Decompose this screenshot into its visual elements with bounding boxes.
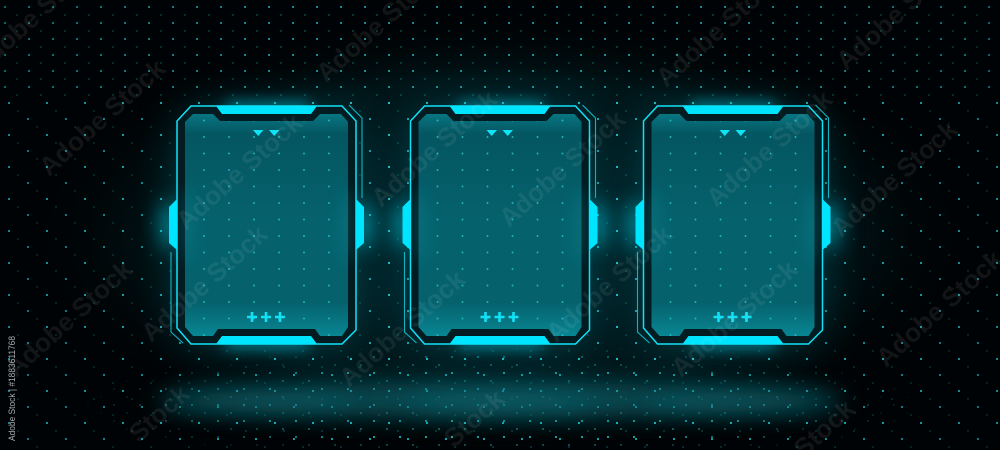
- panel 2: [398, 103, 602, 347]
- panel 2 bottom bar: [450, 336, 550, 344]
- panel 1 corner accent lines: [171, 105, 362, 343]
- panel 3 screen: [646, 114, 820, 336]
- panel 1 bottom bar: [216, 336, 317, 344]
- watermarks: Adobe Stock: [700, 84, 838, 213]
- panel 2 screen: [414, 114, 586, 336]
- panel 2 right tab: [590, 199, 598, 250]
- panel 1 halo: [164, 103, 369, 347]
- panel 1 screen: [180, 114, 353, 336]
- panel 1 outline: [177, 106, 356, 344]
- panel 3: [630, 103, 836, 347]
- panel 1 top bar: [216, 106, 317, 114]
- panel 1 right tab: [356, 199, 364, 250]
- panel 2 top bar: [450, 106, 550, 114]
- panel 2 halo: [398, 103, 602, 347]
- floor reflection glow: [155, 383, 845, 417]
- panel 2 dark frame: [410, 106, 590, 344]
- watermarks: Adobe Stock: [33, 53, 171, 182]
- panel 1 left tab: [169, 199, 177, 250]
- panel 3 outline: [644, 106, 822, 344]
- panel 1 triangles: [253, 130, 280, 136]
- panel 3 triangles: [720, 130, 746, 136]
- panel 1 plus signs: [247, 312, 285, 322]
- watermarks: Stock: [123, 378, 196, 448]
- panel 2 corner accent lines: [404, 105, 596, 343]
- watermarks: Adobe Stock: [665, 254, 803, 383]
- panel 2 left tab: [402, 199, 410, 250]
- panel 2 plus signs: [480, 312, 518, 322]
- watermarks: Adobe Stock: [170, 107, 308, 236]
- panel 2 outline: [410, 106, 590, 344]
- watermarks: Adobe Stock: [825, 114, 963, 243]
- watermarks: Adobe Stock: [365, 84, 503, 213]
- panel 3 dark frame: [644, 106, 822, 344]
- panel 2 triangles: [486, 130, 513, 136]
- watermarks: Adobe Stock: [540, 219, 678, 348]
- watermarks: Adobe Stock: [333, 264, 471, 393]
- panel 3 top bar: [682, 106, 784, 114]
- panel 3 bottom bar: [682, 336, 784, 344]
- watermarks: Adobe Stock: [0, 254, 138, 383]
- panel 3 right tab: [822, 199, 830, 250]
- watermarks: Adobe Stock: [493, 104, 631, 233]
- panel 3 corner accent lines: [638, 105, 828, 343]
- panel 3 halo: [630, 103, 836, 347]
- stock id label: Adobe Stock | #1883611768: [7, 336, 18, 441]
- panel 3 left tab: [636, 199, 644, 250]
- panel 1: [164, 103, 369, 347]
- panel 1 dark frame: [177, 106, 356, 344]
- watermarks: Adobe Stock: [135, 219, 273, 348]
- panel 3 plus signs: [714, 312, 752, 322]
